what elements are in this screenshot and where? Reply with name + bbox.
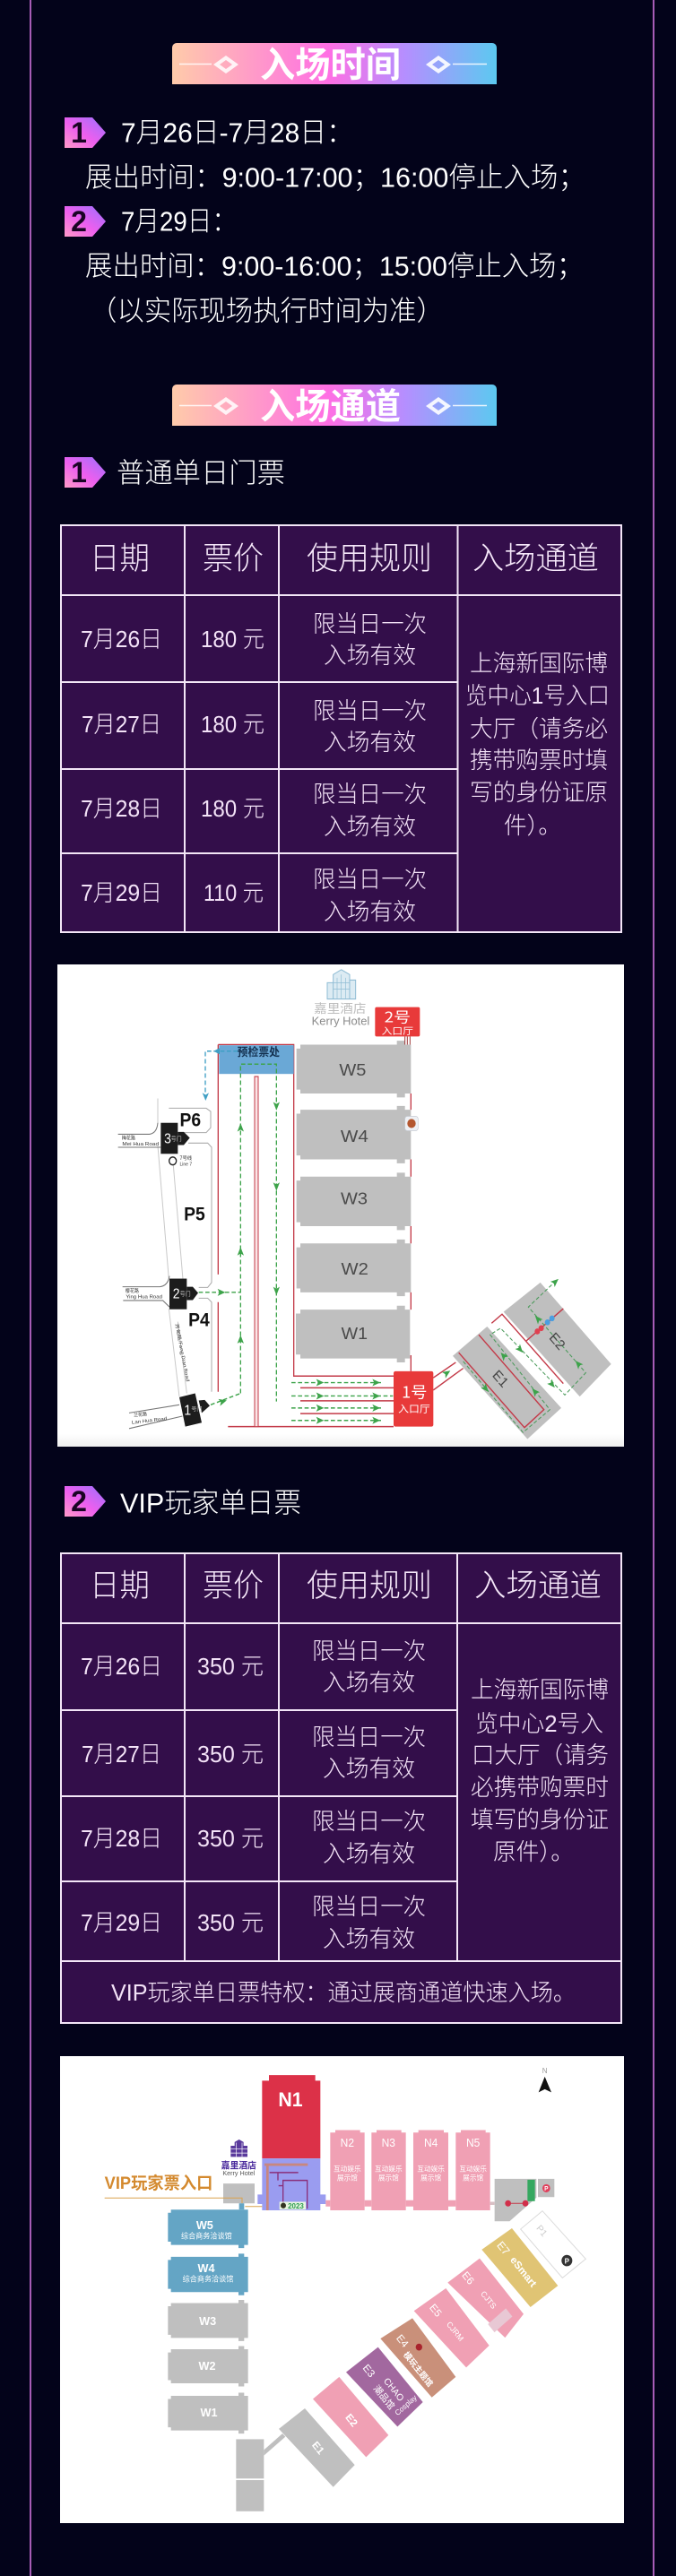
halls W5 and W4: 综合商务洽谈馆 — [181, 2230, 232, 2242]
hall E5: E5 — [427, 2302, 444, 2320]
table header: 入场通道 — [472, 541, 599, 576]
street labels — [122, 1134, 192, 1426]
exhibition hall E2: E2 — [546, 1330, 568, 1353]
entrance description: 写的身份证原 — [470, 779, 608, 806]
row 7月29日: 7月29日 — [81, 1909, 162, 1936]
row 7月26日: 入场有效 — [324, 642, 416, 669]
row 7月27日: 限当日一次 — [312, 1724, 426, 1750]
parking labels: P6 — [180, 1111, 201, 1131]
row 7月26日 — [81, 610, 427, 669]
hall E5 — [414, 2288, 490, 2367]
subheading: 普通单日门票: 普通单日门票 — [117, 457, 285, 489]
hall E1: E1 — [309, 2439, 326, 2458]
street labels: Mei Hua Road — [122, 1142, 159, 1147]
icon: number 1: 1 — [71, 117, 87, 149]
halls N2-N5: N2 — [341, 2137, 354, 2149]
hall E6: E6 — [460, 2269, 476, 2287]
icon: north arrow — [539, 2067, 551, 2092]
row 7月26日: 限当日一次 — [312, 1638, 426, 1664]
row 7月28日: 180 元 — [201, 795, 264, 822]
halls N2-N5: N5 — [466, 2137, 480, 2149]
gate 1 — [179, 1394, 210, 1427]
row 7月29日 — [81, 1893, 426, 1952]
row 7月29日: 限当日一次 — [312, 1893, 426, 1920]
parking P1: P1 — [534, 2224, 549, 2239]
row 7月27日 — [82, 697, 427, 756]
hall E2 — [313, 2377, 388, 2457]
entrance block — [223, 2183, 255, 2209]
halls N2-N5: 互动娱乐 — [459, 2164, 487, 2174]
row 7月28日 — [81, 1808, 426, 1867]
parking labels — [180, 1111, 211, 1331]
heading: 入场通道: 入场通道 — [260, 387, 401, 427]
entrance description — [465, 650, 610, 839]
row 7月27日 — [82, 1724, 426, 1782]
row 7月26日: 限当日一次 — [313, 610, 427, 637]
gate 1: 号门 — [191, 1405, 202, 1413]
gate 2 — [169, 1279, 198, 1310]
halls N2-N5: 互动娱乐 — [375, 2164, 403, 2174]
halls N2-N5: 展示馆 — [378, 2173, 399, 2183]
hall E7: eSmart — [507, 2254, 539, 2290]
entrance description: 口大厅（请务 — [472, 1742, 609, 1768]
hall E4: 模玩主题馆 — [401, 2348, 437, 2389]
row 7月28日: 7月28日 — [81, 1825, 162, 1852]
entrance description: 携带购票时填 — [470, 747, 608, 774]
hall E5: CJRM — [445, 2320, 465, 2343]
row 7月27日: 7月27日 — [82, 1741, 161, 1768]
exhibition halls W1-W5: W1 — [342, 1324, 368, 1343]
entrance description: 大厅（请务必 — [470, 715, 608, 742]
row 7月27日: 350 元 — [197, 1741, 264, 1768]
row 7月27日: 7月27日 — [82, 711, 161, 738]
pre-check ticket office — [219, 1044, 294, 1074]
entrance description: 上海新国际博 — [470, 650, 608, 677]
roads — [118, 1098, 212, 1429]
row 7月29日: 入场有效 — [323, 1925, 415, 1952]
table: VIP single-day tickets — [61, 1553, 621, 2023]
gate 3 — [160, 1123, 193, 1168]
gate 3: 号门 — [171, 1134, 182, 1142]
row 7月28日: 7月28日 — [81, 795, 162, 822]
icon: north arrow: N — [542, 2067, 548, 2075]
halls N2-N5: 互动娱乐 — [334, 2164, 361, 2174]
halls W5 and W4: W4 — [198, 2261, 215, 2275]
hotel: Kerry Hotel: 嘉里酒店 — [221, 2157, 256, 2172]
street labels: 梅花路 — [122, 1134, 136, 1142]
row 7月29日: 限当日一次 — [313, 866, 427, 893]
row 7月26日: 350 元 — [197, 1653, 264, 1680]
street labels: 樱花路 — [126, 1287, 140, 1294]
row 7月28日: 350 元 — [197, 1825, 264, 1852]
subheading: 普通单日门票: 1 — [71, 456, 87, 488]
subheading: VIP玩家单日票: 2 — [71, 1485, 87, 1517]
northeast entrance block — [490, 2179, 554, 2221]
entrance hall 1: 1号 — [402, 1379, 427, 1402]
VIP privilege note: VIP玩家单日票特权：通过展商通道快速入场。 — [111, 1979, 576, 2006]
row 7月26日: 7月26日 — [81, 626, 162, 653]
row 7月27日: 限当日一次 — [313, 697, 427, 724]
icon: number 2 — [65, 205, 106, 238]
entrance blocks south — [236, 2433, 285, 2511]
halls W5 and W4: 综合商务洽谈馆 — [183, 2273, 233, 2284]
hall E2: E2 — [343, 2412, 360, 2429]
exhibition hall E1: E1 — [490, 1368, 511, 1391]
row 7月29日: 350 元 — [197, 1909, 264, 1936]
parking labels: P4 — [188, 1310, 211, 1331]
row 7月26日: 入场有效 — [323, 1669, 415, 1696]
entrance hall 2: 2号 — [385, 1007, 411, 1027]
gate 1: 1 — [184, 1404, 191, 1419]
halls N2-N5: 互动娱乐 — [417, 2164, 445, 2174]
hall N1 — [262, 2075, 320, 2158]
row 7月27日: 入场有效 — [324, 729, 416, 756]
northeast entrance block: P — [544, 2186, 549, 2192]
icon: security badge — [405, 1116, 418, 1130]
hall E3 — [346, 2347, 423, 2426]
halls W5 and W4: W5 — [196, 2218, 213, 2232]
exhibition halls W1-W5: W4 — [341, 1127, 368, 1145]
table header — [90, 541, 599, 576]
subheading: VIP玩家单日票: VIP玩家单日票 — [120, 1488, 301, 1518]
street labels: Ying Hua Road — [126, 1294, 162, 1300]
row 7月26日: 7月26日 — [81, 1653, 162, 1680]
hotel: Kerry Hotel — [221, 2139, 256, 2177]
hall E3: Cosplay — [394, 2393, 419, 2417]
entrance hall 2: 入口厅 — [382, 1024, 413, 1037]
hall E6: CJTS — [479, 2289, 498, 2311]
table header: 使用规则 — [307, 1569, 432, 1604]
gate 3: 3 — [164, 1132, 171, 1146]
street labels: 兰花路 — [134, 1410, 148, 1419]
row 7月29日: 7月29日 — [81, 879, 162, 906]
entrance hall 2 — [375, 1007, 420, 1044]
gate 2: 号门 — [180, 1289, 191, 1298]
exhibition hall E2 — [442, 1276, 611, 1432]
halls W3, W2, W1: W1 — [201, 2405, 217, 2419]
VIP entrance label: VIP玩家票入口 — [105, 2174, 212, 2192]
table header: 票价 — [203, 541, 264, 576]
hall E7: E7 — [494, 2239, 512, 2258]
row 7月27日: 入场有效 — [323, 1755, 415, 1782]
halls N2-N5: 展示馆 — [420, 2173, 441, 2183]
hall E6 — [447, 2259, 524, 2338]
hall E3: 潮品馆 — [371, 2382, 398, 2412]
panel: venue map, entrance 1 — [57, 964, 624, 1447]
hall E4: E4 — [394, 2332, 411, 2350]
icon: number 1 — [65, 117, 106, 149]
halls W3, W2, W1 — [168, 2300, 248, 2433]
VIP access area: 2023 — [288, 2202, 304, 2210]
heading: 入场时间: 入场时间 — [260, 46, 401, 85]
heading: 入场时间 — [172, 43, 497, 85]
halls W3, W2, W1: W2 — [199, 2359, 215, 2373]
halls N2-N5: 展示馆 — [337, 2173, 358, 2183]
exhibition hall E1 — [433, 1327, 561, 1439]
gate 3: Line 7 — [180, 1163, 192, 1168]
row 7月28日: 限当日一次 — [313, 781, 427, 808]
entrance description: 填写的身份证 — [471, 1806, 609, 1833]
table header — [90, 1569, 602, 1604]
street labels: Lan Hua Road — [132, 1416, 168, 1426]
street labels: 芳甸路/Fang Dian Road — [174, 1323, 192, 1382]
row 7月28日: 入场有效 — [323, 1840, 415, 1867]
entrance description: 览中心2号入 — [475, 1710, 603, 1737]
entrance description: 件）。 — [504, 812, 561, 839]
VIP entrance label — [105, 2174, 262, 2207]
VIP access area — [257, 2158, 325, 2210]
row 7月29日 — [81, 866, 427, 925]
exhibition halls W1-W5: W2 — [341, 1260, 368, 1278]
table header: 日期 — [90, 541, 150, 576]
parking P1: P — [565, 2257, 570, 2265]
row 7月26日 — [81, 1638, 426, 1696]
halls N2-N5: 展示馆 — [463, 2173, 483, 2183]
parking P1 — [521, 2211, 585, 2278]
pre-check ticket office: 预检票处 — [238, 1044, 280, 1059]
row 7月26日: 180 元 — [201, 626, 264, 653]
parking labels: P5 — [184, 1205, 205, 1225]
heading: 入场通道 — [172, 385, 497, 427]
hall E3: E3 — [360, 2362, 377, 2380]
icon: Kerry Hotel: 嘉里酒店 — [314, 998, 366, 1016]
hall E3: CHAO — [381, 2376, 405, 2404]
hall N1: N1 — [278, 2088, 303, 2111]
row 7月29日: 110 元 — [204, 879, 264, 906]
row 7月28日 — [81, 781, 427, 840]
exhibition halls W1-W5 — [296, 1041, 411, 1362]
entrance description: 原件）。 — [493, 1838, 574, 1865]
table header: 使用规则 — [307, 541, 432, 576]
table header: 票价 — [203, 1569, 264, 1604]
table header: 入场通道 — [474, 1569, 602, 1604]
halls N2-N5 — [325, 2130, 490, 2210]
hotel: Kerry Hotel: Kerry Hotel — [222, 2171, 256, 2177]
entrance description: 览中心1号入口 — [465, 682, 610, 709]
halls N2-N5: N3 — [382, 2137, 395, 2149]
date range 2: 7月29日： — [121, 206, 237, 237]
hall E1 — [279, 2408, 355, 2487]
hall E4 — [380, 2318, 455, 2398]
table: standard single-day tickets — [61, 525, 621, 932]
halls W3, W2, W1: W3 — [199, 2314, 216, 2328]
gate 2: 2 — [173, 1287, 180, 1302]
halls W5 and W4 — [168, 2209, 248, 2295]
entrance hall 1: 入口厅 — [398, 1402, 430, 1416]
green walking routes — [199, 1064, 393, 1424]
entrance description: 必携带购票时 — [471, 1774, 609, 1801]
icon: Kerry Hotel — [312, 970, 369, 1028]
icon: number 2: 2 — [71, 205, 87, 238]
blue walking route — [203, 1048, 238, 1101]
icon: Kerry Hotel: Kerry Hotel — [312, 1015, 369, 1028]
exhibition halls W1-W5: W5 — [339, 1060, 366, 1079]
panel: VIP entrance map — [60, 2056, 624, 2523]
entrance hall 1 — [394, 1371, 433, 1427]
row 7月28日: 入场有效 — [324, 813, 416, 840]
entrance description — [471, 1676, 609, 1865]
red route barriers — [218, 1044, 411, 1427]
hours 1: 展出时间：9:00-17:00；16:00停止入场； — [85, 161, 585, 194]
row 7月27日: 180 元 — [201, 711, 264, 738]
entry time schedule — [65, 117, 585, 326]
gate 3: 7号线 — [180, 1154, 193, 1162]
table header: 日期 — [90, 1569, 150, 1604]
row 7月28日: 限当日一次 — [312, 1808, 426, 1835]
hours 2: 展出时间：9:00-16:00；15:00停止入场； — [85, 251, 584, 281]
entrance description: 上海新国际博 — [471, 1676, 609, 1703]
halls N2-N5: N4 — [424, 2137, 438, 2149]
date range 1: 7月26日-7月28日： — [121, 117, 353, 149]
row 7月29日: 入场有效 — [324, 898, 416, 925]
hall E7 — [481, 2228, 558, 2307]
note: （以实际现场执行时间为准） — [90, 296, 444, 326]
exhibition halls W1-W5: W3 — [341, 1189, 368, 1208]
